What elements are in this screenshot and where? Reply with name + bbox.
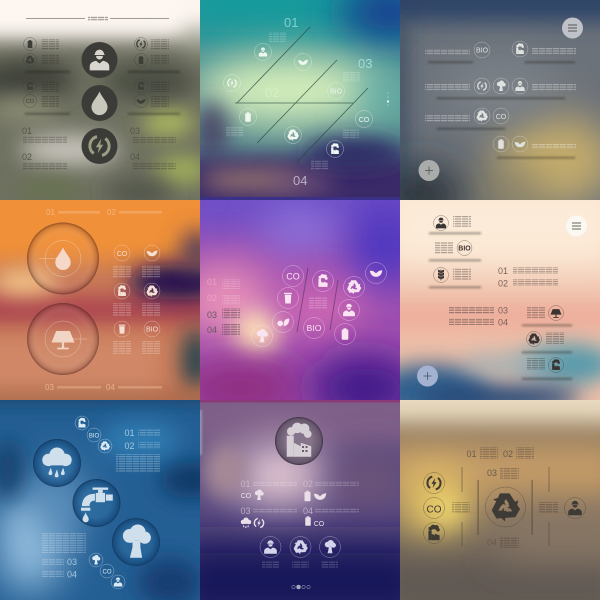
numbered notes: 01: [466, 449, 477, 459]
numbered notes: 03: [498, 306, 508, 316]
numbered notes: 02: [207, 293, 217, 303]
dark ring icons: [434, 216, 564, 372]
numbered notes: 01: [124, 428, 135, 438]
dark circle: energy: [82, 128, 118, 164]
numbered notes: 03: [207, 310, 217, 320]
background: violet blur: [170, 170, 430, 422]
background: gold blur: [370, 370, 600, 600]
side ring icons: [424, 472, 586, 544]
left icon rows: CO: [26, 99, 35, 105]
background: cream to blue blur: [370, 170, 600, 420]
numbered notes: [240, 479, 359, 516]
panel: teal blur with diagonal slashes: [200, 0, 400, 200]
numbered notes: 03: [67, 557, 77, 567]
numbered notes: 04: [487, 538, 497, 548]
numbered notes: 03: [487, 468, 497, 478]
ring icons with captions: BIO: [146, 326, 159, 334]
numbered notes: 02: [498, 278, 508, 288]
large ring icons with captions: [260, 536, 340, 568]
menu button: [562, 18, 583, 38]
text blocks: [226, 32, 360, 170]
numbers: [265, 15, 372, 188]
numbers: 03: [358, 56, 372, 71]
numbered notes: 03: [240, 506, 251, 516]
panel: golden blur with central recycle: [400, 400, 600, 600]
numbered notes: 01: [207, 277, 217, 287]
header rule and caption: [26, 17, 169, 20]
dark ring icons: BIO: [458, 246, 471, 252]
ring icons: BIO: [330, 88, 343, 96]
panel: orange blur with bubbles: [0, 200, 200, 400]
ring icons: [224, 44, 372, 158]
center recycle circle: [486, 487, 526, 527]
side ring icons: CO: [426, 504, 442, 516]
background: blue blur: [0, 380, 230, 600]
numbered notes: [42, 428, 160, 580]
panel: dusk blur with factory bubble: [200, 400, 400, 600]
ring icons with captions: [113, 245, 160, 354]
background: dusk blur: [170, 375, 430, 600]
numbered notes: 02: [22, 152, 32, 162]
background: green blur: [0, 0, 240, 202]
ring icons: CO: [359, 117, 370, 124]
numbered notes: [452, 447, 558, 548]
numbered notes: [45, 208, 162, 392]
page dots: [387, 92, 389, 106]
text blocks: [425, 48, 576, 149]
right icon rows: [134, 38, 169, 108]
numbered notes: [207, 277, 240, 335]
slash dividers: [297, 268, 338, 332]
center caption: [309, 297, 327, 309]
numbers: 01: [284, 15, 298, 30]
bubble: rain cloud: [33, 439, 81, 487]
numbered notes: 02: [124, 441, 135, 451]
ring icons: BIO: [307, 323, 322, 333]
numbered notes: 03: [130, 126, 140, 136]
left icon rows: [24, 38, 59, 108]
ring icons: [252, 262, 386, 346]
small ring icons: CO: [102, 570, 112, 576]
numbered notes: 03: [45, 383, 54, 392]
row shadows: [429, 232, 572, 380]
dark circle: worker: [82, 42, 118, 78]
ring icons with captions: CO: [117, 251, 128, 258]
numbered notes: 04: [130, 152, 140, 162]
numbers: 04: [293, 173, 307, 188]
vertical dividers: [462, 467, 550, 546]
menu button: [566, 216, 587, 236]
background: slate to tan blur: [370, 0, 600, 223]
row shadows: [428, 62, 575, 158]
bubble: factory: [275, 417, 323, 465]
numbered notes: 01: [22, 126, 32, 136]
panel: violet blur with slashed icon arc: [200, 200, 400, 400]
numbered notes: [22, 126, 176, 170]
background: sunset blur: [0, 170, 232, 416]
ring icons: BIO: [476, 48, 489, 54]
small ring icons: BIO: [89, 433, 99, 439]
numbered notes: [449, 266, 558, 328]
numbered notes: 04: [67, 570, 77, 580]
numbered notes: 02: [503, 449, 513, 459]
numbered notes: 04: [207, 325, 217, 335]
numbered notes: 02: [107, 208, 116, 217]
numbered notes: 01: [240, 479, 251, 489]
pager dots: [292, 585, 310, 589]
numbered notes: 04: [303, 506, 313, 516]
numbered notes: 01: [498, 266, 508, 276]
add button: [417, 366, 438, 386]
row dividers: [25, 71, 180, 115]
numbered notes: 04: [498, 318, 508, 328]
panel: blurred green with dark circles: [0, 0, 200, 200]
text blocks: [435, 216, 564, 370]
diagonal slashes: [235, 27, 368, 162]
bubble: solar panel: [27, 303, 99, 375]
numbered notes: 01: [46, 208, 55, 217]
ring icons: CO: [496, 114, 507, 121]
background: teal blur: [170, 0, 440, 225]
plain icons: CO: [314, 521, 325, 528]
numbered notes: 04: [106, 383, 115, 392]
ring icons: [474, 41, 528, 152]
dark circle: drop: [82, 85, 118, 121]
ring icons: CO: [286, 272, 300, 282]
panel: slate blur with action buttons: [400, 0, 600, 200]
small ring icons: [75, 416, 125, 589]
panel: cream blur with dark icons: [400, 200, 600, 400]
plain icons: CO: [241, 493, 252, 500]
add button: [418, 160, 440, 181]
panel: blue blur with water bubbles: [0, 400, 200, 600]
numbered notes: 02: [303, 479, 313, 489]
bubble: tree: [112, 518, 160, 566]
plain icons: [241, 490, 326, 528]
bubble: water drop: [27, 222, 99, 294]
bubble: water tap: [72, 479, 120, 527]
numbers: 02: [265, 85, 279, 100]
